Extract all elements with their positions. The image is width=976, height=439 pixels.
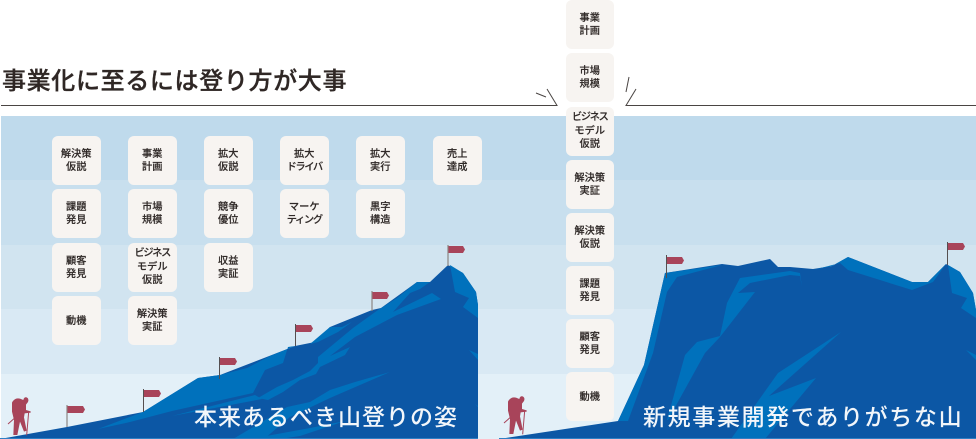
card (280, 136, 328, 184)
card: 事業 (142, 149, 162, 160)
card: 発見 (66, 215, 86, 226)
flag 5 (372, 291, 389, 311)
card: 拡大 (218, 149, 238, 160)
card: ビジネス (134, 248, 170, 259)
cards: reversed stack in the middle (566, 0, 614, 421)
card: 優位 (218, 215, 238, 226)
card: 計画 (142, 162, 162, 173)
card: 拡大 (294, 149, 314, 160)
card: 課題 (580, 279, 600, 290)
background: layered sky bands (1, 116, 976, 439)
card: 計画 (580, 26, 600, 37)
card: 解決策 (574, 173, 605, 184)
card: 仮説 (580, 139, 600, 150)
card (128, 243, 176, 292)
card (566, 0, 614, 48)
card (566, 53, 614, 102)
card (204, 189, 252, 238)
card: 構造 (370, 215, 390, 226)
card (52, 243, 100, 292)
icon: hiker left (8, 397, 31, 435)
card: 解決策 (137, 309, 168, 320)
card: モデル (137, 262, 168, 273)
card (566, 160, 614, 208)
flag: cliff top (666, 255, 684, 278)
card (204, 136, 252, 184)
caption: ideal climb: 本来あるべき山登りの姿 (194, 404, 458, 430)
card: 動機 (580, 392, 600, 403)
caption: typical new business: 新規事業開発でありがちな山 (643, 404, 963, 430)
flag 4 (296, 324, 313, 346)
card: 実証 (580, 186, 600, 197)
card: 売上 (447, 149, 467, 160)
card: 課題 (66, 202, 86, 213)
card: 顧客 (66, 256, 86, 267)
card (204, 243, 252, 292)
card: 実証 (142, 322, 162, 333)
card: モデル (574, 126, 605, 137)
card: 発見 (66, 269, 86, 280)
card (566, 319, 614, 368)
card: 発見 (580, 292, 600, 303)
card (128, 136, 176, 184)
card (128, 296, 176, 344)
card: ドライバ (287, 162, 322, 173)
card (566, 266, 614, 314)
flag 2 (144, 389, 161, 412)
card: 実行 (370, 162, 390, 173)
card (52, 296, 100, 344)
card (566, 213, 614, 262)
card: 黒字 (370, 202, 390, 213)
card: 市場 (142, 202, 162, 213)
card: 事業 (580, 13, 600, 24)
card: 解決策 (574, 226, 605, 237)
card (566, 107, 614, 156)
card (52, 136, 100, 184)
title: 事業化に至るには登り方が大事 (2, 68, 347, 95)
card: ビジネス (572, 112, 608, 123)
card: 市場 (580, 66, 600, 77)
card: 動機 (66, 316, 86, 327)
card (280, 189, 328, 238)
title rules and emphasis ticks (1, 76, 976, 106)
card: 競争 (218, 202, 238, 213)
card: 収益 (218, 256, 238, 267)
flag: far summit (948, 242, 965, 265)
card: 発見 (580, 345, 600, 356)
flag 6 summit (448, 245, 465, 266)
card (566, 372, 614, 420)
card (433, 136, 482, 184)
card: 仮説 (580, 239, 600, 250)
card: 解決策 (61, 149, 92, 160)
card: ティング (287, 215, 322, 226)
card: 仮説 (142, 275, 162, 286)
card (128, 189, 176, 238)
mountain: steep new-business cliff (499, 257, 976, 439)
flag 1 (67, 405, 85, 427)
card (52, 189, 100, 238)
mountain: ideal gradual climb (0, 265, 478, 439)
cards: ideal climb steps (52, 136, 482, 345)
icon: hiker right (504, 396, 527, 434)
card: 顧客 (580, 332, 600, 343)
card: 規模 (142, 215, 162, 226)
card: マーケ (289, 202, 320, 213)
card (356, 189, 404, 238)
card: 達成 (447, 162, 467, 173)
card: 規模 (580, 79, 600, 90)
card (356, 136, 404, 184)
card: 拡大 (370, 149, 390, 160)
flag 3 (220, 357, 237, 379)
card: 仮説 (218, 162, 238, 173)
card: 実証 (218, 269, 238, 280)
card: 仮説 (66, 162, 86, 173)
